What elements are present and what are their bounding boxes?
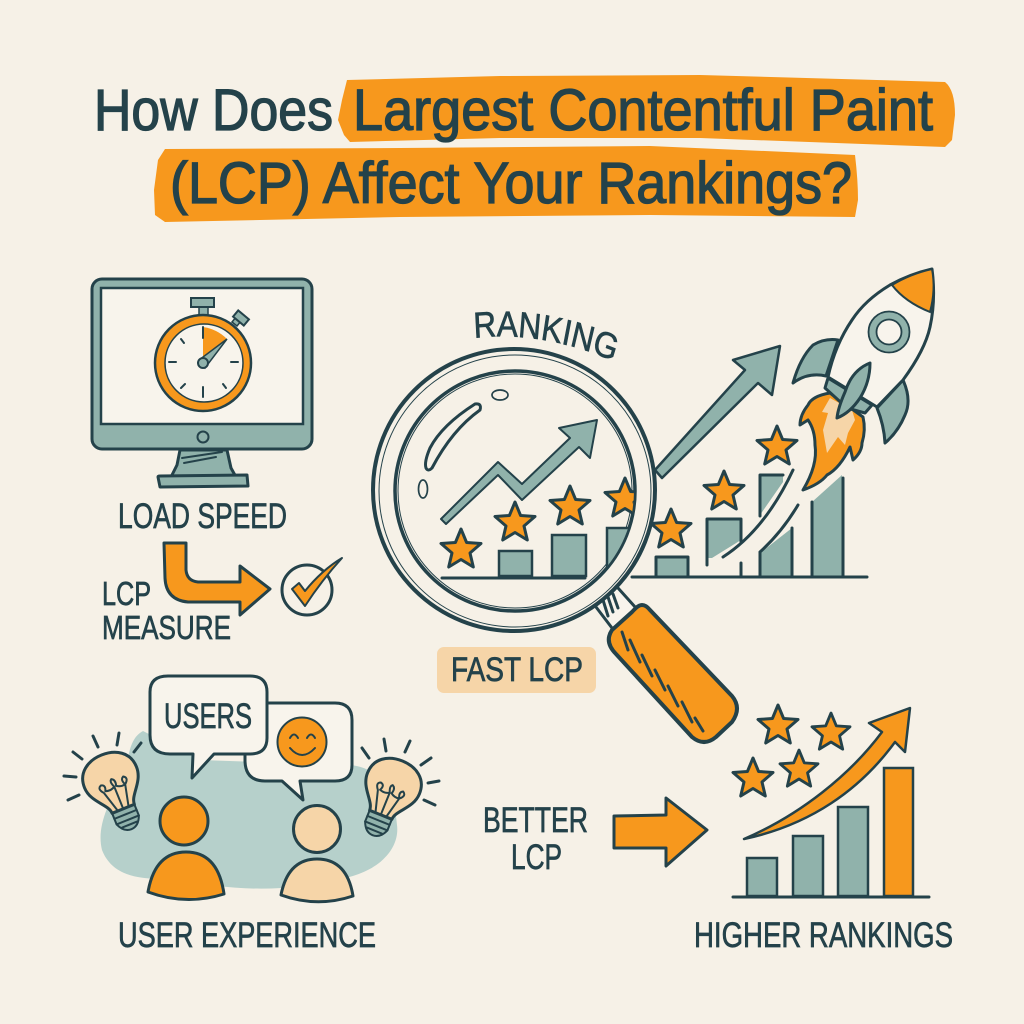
- illustration: user experience: [64, 676, 439, 902]
- illustration: ranking chart behind magnifier: [632, 346, 867, 577]
- monitor body: [92, 279, 312, 449]
- large ranking arrow: [655, 346, 780, 478]
- label: LCP measure: LCP: [102, 575, 151, 612]
- rocket flame: [800, 393, 864, 490]
- chart baseline: [632, 576, 867, 578]
- chart bars: [655, 475, 843, 576]
- rays left: [64, 733, 141, 800]
- magnifier neck: [596, 588, 636, 628]
- rocket center fin: [837, 363, 870, 418]
- label: load speed: LOAD SPEED: [118, 497, 287, 536]
- lens trend arrow: [441, 420, 597, 524]
- title line 1 plain: How Does: [94, 78, 333, 143]
- left speech bubble: [150, 676, 267, 778]
- growth arrow: [744, 708, 910, 839]
- lens stars: [441, 478, 645, 567]
- bars: [747, 768, 913, 896]
- star ratings: [651, 426, 797, 547]
- label: better LCP: BETTER: [483, 801, 588, 840]
- baseline: [733, 896, 929, 898]
- rays right: [362, 739, 439, 805]
- rating stars: [733, 705, 850, 796]
- person left: [148, 797, 224, 900]
- title highlight line 1: [338, 75, 955, 147]
- label: LCP measure: [102, 575, 231, 646]
- title line 2: (LCP) Affect Your Rankings?: [170, 151, 852, 216]
- monitor stand: [171, 450, 236, 477]
- badge: fast LCP: [437, 647, 596, 693]
- speed swoosh lines: [723, 470, 798, 557]
- monitor screen: [101, 288, 303, 424]
- title line 1 highlighted: Largest Contentful Paint: [353, 78, 933, 143]
- label: user experience: USER EXPERIENCE: [118, 916, 376, 955]
- label: ranking curved: RANKING: [475, 311, 618, 358]
- icon: orange L-shaped arrow: [164, 543, 270, 615]
- lens glare: [418, 390, 508, 498]
- title highlight line 2: [154, 146, 858, 222]
- label: better LCP: [483, 801, 588, 877]
- title: [94, 75, 955, 222]
- lens bars: [499, 528, 650, 576]
- right speech bubble with smiley: [245, 703, 352, 800]
- badge: fast LCP: FAST LCP: [451, 651, 583, 689]
- icon: rocket: [793, 269, 934, 490]
- label: higher rankings: HIGHER RANKINGS: [694, 916, 953, 955]
- monitor button: [198, 432, 208, 442]
- lens content: [441, 420, 650, 578]
- person right: [281, 806, 353, 902]
- label: better LCP: LCP: [511, 838, 562, 877]
- monitor base: [158, 475, 248, 487]
- rocket inner flame: [822, 398, 855, 453]
- light bulb right: [347, 751, 428, 846]
- left speech bubble: USERS: [164, 697, 252, 736]
- rocket body: [828, 269, 934, 407]
- rocket nozzle: [825, 378, 872, 413]
- icon: magnifying glass: [373, 349, 737, 742]
- rocket nose cone: [892, 269, 934, 312]
- icon: check mark in circle: [282, 558, 342, 615]
- background blob: [101, 731, 397, 889]
- icon: monitor with stopwatch: [92, 279, 312, 487]
- rocket right fin: [877, 380, 908, 443]
- lens baseline: [442, 576, 585, 580]
- stopwatch: [155, 298, 251, 411]
- rocket window: [872, 316, 906, 348]
- icon: better LCP arrow: [614, 798, 707, 866]
- chart: higher rankings: [733, 705, 929, 897]
- label: LCP measure: MEASURE: [102, 609, 231, 646]
- magnifier lens rim: [373, 349, 655, 631]
- magnifier handle: [609, 605, 737, 742]
- rocket left fin: [793, 340, 838, 383]
- light bulb left: [76, 745, 157, 840]
